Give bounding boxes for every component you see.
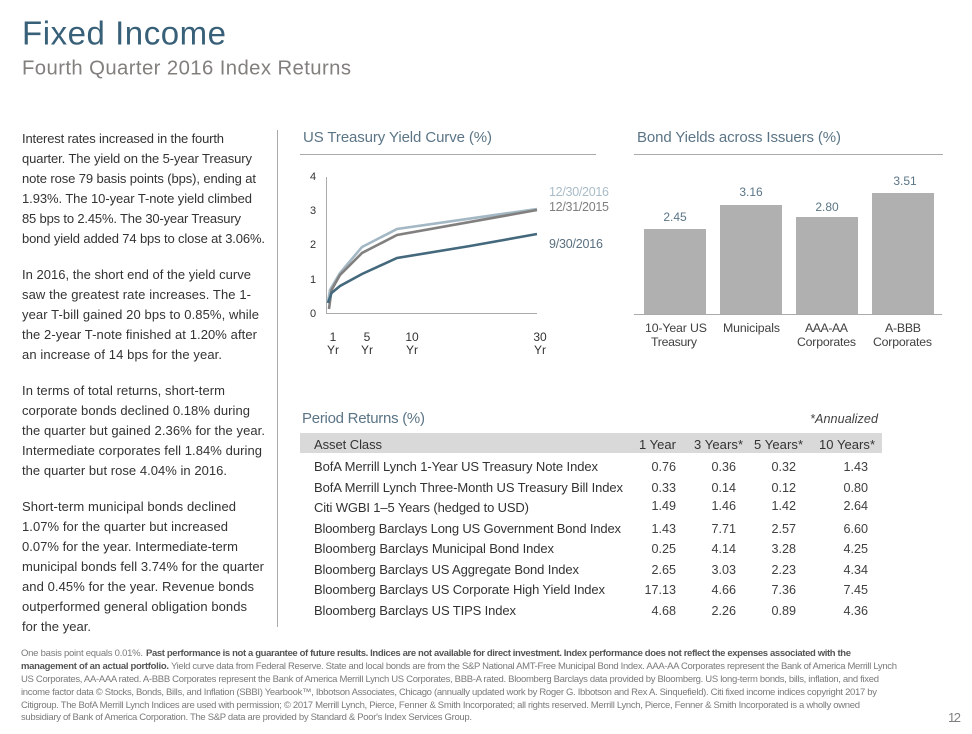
- row: Long US Government: 7.71: [711, 522, 736, 536]
- row: US Corporate High Yield: 7.36: [771, 583, 796, 597]
- row: 1-Year Treasury Note: 0.32: [771, 460, 796, 474]
- legend label: 9/30/2016: 9/30/2016: [549, 237, 603, 251]
- panel: period returns table: [300, 410, 882, 618]
- row: Municipal Bond: [314, 541, 868, 556]
- paragraph: municipal bonds: for the year.: [22, 619, 91, 634]
- bar values: 2.45: [663, 210, 687, 224]
- paragraph: total returns: the quarter but gained 2.36% for the year.: [22, 423, 265, 438]
- row: Citi WGBI: [314, 499, 868, 515]
- table header: [300, 433, 882, 453]
- paragraph: short end of curve: year T-bill gained 20 bps to 0.85%, while: [22, 307, 259, 322]
- row: Municipal Bond: 0.25: [651, 542, 676, 556]
- row: US TIPS: 4.68: [651, 604, 676, 618]
- heading: yield curve: US Treasury Yield Curve (%): [303, 129, 492, 146]
- paragraph: short end of curve: [22, 267, 259, 362]
- row: US Corporate High Yield: Bloomberg Barclays US Corporate High Yield Index: [314, 582, 606, 597]
- paragraph: municipal bonds: 1.07% for the quarter but increased: [22, 519, 228, 534]
- footnote: [21, 648, 897, 723]
- row: US Corporate High Yield: 17.13: [644, 583, 676, 597]
- row: US Aggregate: 4.34: [843, 563, 868, 577]
- bar category labels: Municipals: [723, 321, 780, 335]
- paragraph: interest rates: Interest rates increased in the fourth: [22, 131, 224, 146]
- paragraph: total returns: [22, 383, 265, 478]
- row: Long US Government: 2.57: [771, 522, 796, 536]
- bar values: 2.80: [815, 200, 839, 214]
- paragraph: total returns: In terms of total returns, short-term: [22, 383, 225, 398]
- row: US TIPS: Bloomberg Barclays US TIPS Index: [314, 603, 516, 618]
- table header: 1 Year: [639, 437, 677, 452]
- row: Long US Government: 1.43: [651, 522, 676, 536]
- row: 1-Year Treasury Note: 0.76: [651, 460, 676, 474]
- bar: A-BBB Corporates: [872, 193, 934, 314]
- footnote: income factor data © Stocks, Bonds, Bills, and Inflation (SBBI) Yearbook™, Ibbotson Associates, Chicago (annually updated work by Roger G. Ibbotson and Rex A. Sinquefield). Citi fixed income indices copyright 2017 by: [21, 687, 877, 698]
- footnote: management of an actual portfolio.: [21, 661, 169, 672]
- paragraph: short end of curve: saw the greatest rate increases. The 1-: [22, 287, 251, 302]
- series: 12/31/2015: [329, 210, 537, 309]
- row: US Aggregate: [314, 562, 868, 577]
- bar chart: bond yields: [634, 174, 942, 349]
- y axis labels: 3: [310, 205, 316, 217]
- row: Municipal Bond: 4.14: [711, 542, 736, 556]
- row: Citi WGBI: Citi WGBI 1–5 Years (hedged to USD): [314, 500, 529, 515]
- panel: commentary text: [22, 131, 265, 634]
- row: Three-Month Treasury Bill: 0.12: [771, 481, 796, 495]
- bar category labels: Treasury: [651, 335, 698, 349]
- paragraph: interest rates: [22, 131, 265, 246]
- row: US Aggregate: 2.65: [651, 563, 676, 577]
- row: US TIPS: 0.89: [771, 604, 796, 618]
- footnote: Citigroup. The BofA Merrill Lynch Indices are used with permission; © 2017 Merrill Lynch, Pierce, Fenner & Smith Incorporated; all rights reserved. Merrill Lynch, Pierce, Fenner & Smith Incorporated is a wholly owned: [21, 700, 860, 711]
- y axis labels: 4: [310, 171, 316, 183]
- paragraph: municipal bonds: [22, 499, 265, 634]
- table header: 3 Years*: [694, 437, 743, 452]
- row: Citi WGBI: 1.46: [711, 499, 736, 513]
- footnote: One basis point equals 0.01%.: [21, 648, 143, 659]
- x axis labels: [327, 330, 547, 357]
- row: US Corporate High Yield: 4.66: [711, 583, 736, 597]
- paragraph: municipal bonds: outperformed general obligation bonds: [22, 599, 248, 614]
- paragraph: short end of curve: In 2016, the short end of the yield curve: [22, 267, 251, 282]
- bar values: [663, 174, 917, 224]
- paragraph: total returns: the quarter but rose 4.04% in 2016.: [22, 463, 227, 478]
- row: Municipal Bond: 3.28: [771, 542, 796, 556]
- x axis labels: 10: [405, 330, 419, 344]
- row: US Corporate High Yield: [314, 582, 868, 597]
- x axis labels: Yr: [534, 343, 546, 357]
- row: Three-Month Treasury Bill: [314, 480, 868, 495]
- row: Long US Government: Bloomberg Barclays Long US Government Bond Index: [314, 521, 622, 536]
- bar: AAA-AA Corporates: [796, 217, 858, 314]
- heading: period returns: Period Returns (%): [302, 410, 425, 427]
- paragraph: municipal bonds: Short-term municipal bonds declined: [22, 499, 236, 514]
- bar values: 3.16: [739, 185, 763, 199]
- row: Three-Month Treasury Bill: 0.80: [843, 481, 868, 495]
- paragraph: total returns: Intermediate corporates fell 1.84% during: [22, 443, 262, 458]
- bar category labels: [645, 321, 932, 349]
- panel: bond yields across issuers: [634, 129, 943, 349]
- row: US TIPS: [314, 603, 868, 618]
- bar values: 3.51: [893, 174, 917, 188]
- bar: Municipals: [720, 205, 782, 314]
- subtitle: Fourth Quarter 2016 Index Returns: [22, 58, 351, 80]
- row: 1-Year Treasury Note: [314, 459, 868, 474]
- table header: 10 Years*: [819, 437, 875, 452]
- bar category labels: 10-Year US: [645, 321, 707, 335]
- row: Municipal Bond: Bloomberg Barclays Municipal Bond Index: [314, 541, 554, 556]
- row: Three-Month Treasury Bill: 0.14: [711, 481, 736, 495]
- paragraph: short end of curve: an increase of 14 bps for the year.: [22, 347, 222, 362]
- note: annualized: *Annualized: [810, 412, 879, 426]
- row: US TIPS: 4.36: [843, 604, 868, 618]
- row: US TIPS: 2.26: [711, 604, 736, 618]
- paragraph: total returns: corporate bonds declined 0.18% during: [22, 403, 250, 418]
- panel: US Treasury yield curve: [300, 129, 609, 357]
- y axis labels: 0: [310, 308, 316, 320]
- line chart: yield curves: [310, 171, 609, 357]
- row: US Corporate High Yield: 7.45: [843, 583, 868, 597]
- series: 12/30/2016: [328, 209, 537, 302]
- row: Citi WGBI: 1.49: [651, 499, 676, 513]
- x axis labels: 5: [364, 330, 371, 344]
- page number: 12: [948, 710, 961, 725]
- row: Citi WGBI: 1.42: [771, 499, 796, 513]
- bar category labels: Corporates: [873, 335, 932, 349]
- bar category labels: Corporates: [797, 335, 856, 349]
- x axis labels: 30: [533, 330, 547, 344]
- heading: bond yields: Bond Yields across Issuers (%): [637, 129, 841, 146]
- paragraph: interest rates: 85 bps to 2.45%. The 30-year Treasury: [22, 211, 242, 226]
- bar category labels: AAA-AA: [805, 321, 849, 335]
- row: 1-Year Treasury Note: 1.43: [843, 460, 868, 474]
- footnote: Yield curve data from Federal Reserve. State and local bonds are from the S&P National AMT-Free Municipal Bond Index. AAA-AA Corporates represent the Bank of America Merrill Lynch: [171, 661, 897, 672]
- x axis labels: Yr: [361, 343, 373, 357]
- row: Three-Month Treasury Bill: BofA Merrill Lynch Three-Month US Treasury Bill Index: [314, 480, 624, 495]
- row: 1-Year Treasury Note: 0.36: [711, 460, 736, 474]
- paragraph: interest rates: quarter. The yield on the 5-year Treasury: [22, 151, 252, 166]
- row: US Aggregate: Bloomberg Barclays US Aggregate Bond Index: [314, 562, 580, 577]
- row: US Aggregate: 3.03: [711, 563, 736, 577]
- series: 9/30/2016: [328, 234, 537, 303]
- x axis labels: 1: [330, 330, 337, 344]
- paragraph: interest rates: bond yield added 74 bps to close at 3.06%.: [22, 231, 265, 246]
- legend label: 12/30/2016: 12/30/2016: [549, 185, 609, 199]
- y axis labels: [310, 171, 316, 320]
- y axis labels: 2: [310, 239, 316, 251]
- footnote: subsidiary of Bank of America Corporation. The S&P data are provided by Standard & Poor's Index Services Group.: [21, 712, 472, 723]
- paragraph: interest rates: note rose 79 basis points (bps), ending at: [22, 171, 256, 186]
- bar category labels: A-BBB: [885, 321, 921, 335]
- paragraph: short end of curve: the 2-year T-note finished at 1.20% after: [22, 327, 258, 342]
- row: Long US Government: [314, 521, 868, 536]
- x axis labels: Yr: [406, 343, 418, 357]
- row: US Aggregate: 2.23: [771, 563, 796, 577]
- row: 1-Year Treasury Note: BofA Merrill Lynch 1-Year US Treasury Note Index: [314, 459, 598, 474]
- paragraph: municipal bonds: and 0.45% for the year. Revenue bonds: [22, 579, 254, 594]
- paragraph: interest rates: 1.93%. The 10-year T-note yield climbed: [22, 191, 252, 206]
- x axis labels: Yr: [327, 343, 339, 357]
- paragraph: municipal bonds: 0.07% for the year. Intermediate-term: [22, 539, 238, 554]
- y axis labels: 1: [310, 274, 316, 286]
- row: Three-Month Treasury Bill: 0.33: [651, 481, 676, 495]
- table header: 5 Years*: [754, 437, 803, 452]
- table header: Asset Class: [314, 437, 382, 452]
- title: Fixed Income: [22, 14, 226, 52]
- row: Citi WGBI: 2.64: [843, 499, 868, 513]
- row: Municipal Bond: 4.25: [843, 542, 868, 556]
- legend label: 12/31/2015: 12/31/2015: [549, 200, 609, 214]
- row: Long US Government: 6.60: [843, 522, 868, 536]
- bar: 10-Year US Treasury: [644, 229, 706, 314]
- paragraph: municipal bonds: municipal bonds fell 3.74% for the quarter: [22, 559, 265, 574]
- footnote: Past performance is not a guarantee of future results. Indices are not available for direct investment. Index performance does not reflect the expenses associated with the: [146, 648, 851, 659]
- footnote: US Corporates, AA-AAA rated. A-BBB Corporates represent the Bank of America Merrill Lynch US Corporates, BBB-A rated. Bloomberg Barclays data provided by Bloomberg. US long-term bonds, bills, inflation, and fixed: [21, 674, 879, 685]
